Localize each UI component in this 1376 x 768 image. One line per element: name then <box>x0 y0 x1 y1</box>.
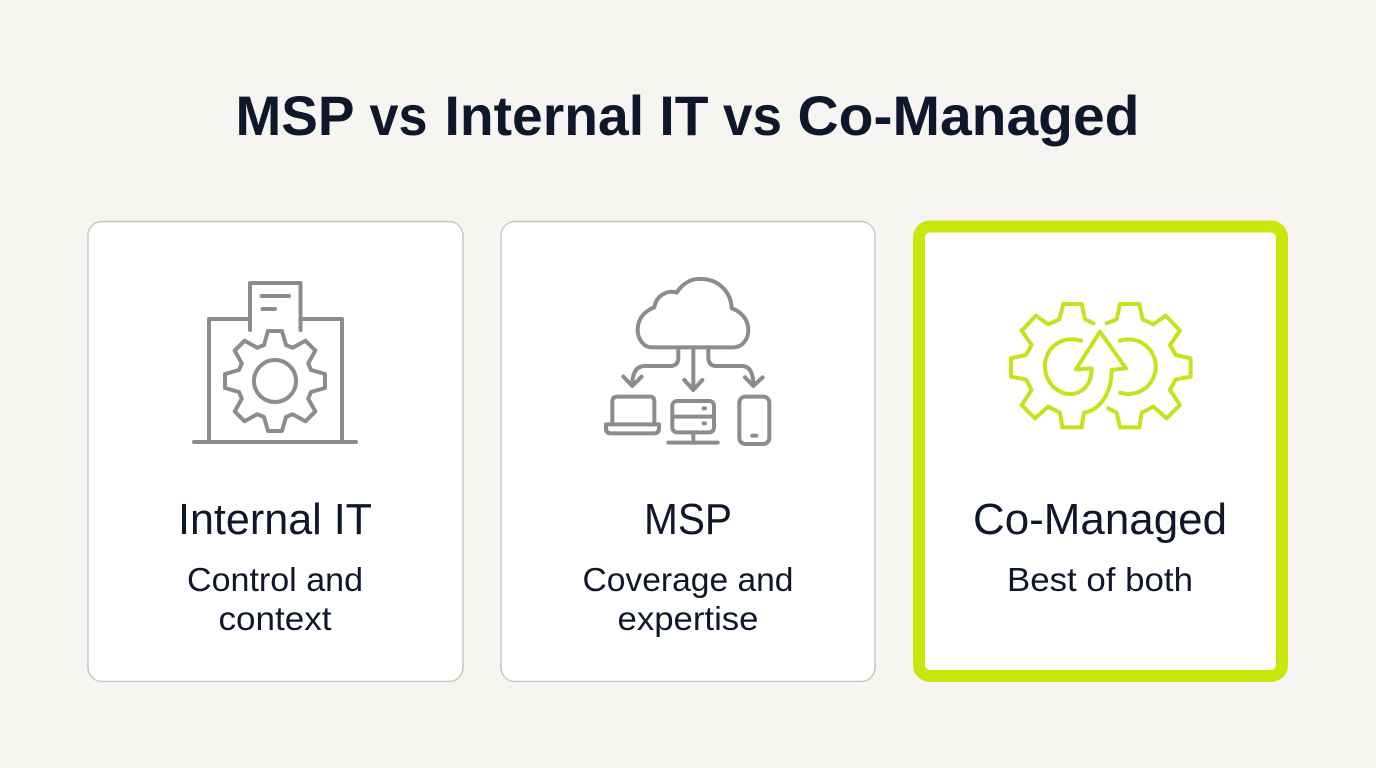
panel: Internal IT <box>88 222 463 682</box>
heading: MSP: MSP <box>644 496 732 544</box>
title: vs <box>370 84 428 147</box>
panel: Co-Managed (highlighted) <box>919 226 1282 676</box>
heading: Co-Managed: Co-Managed <box>973 496 1227 544</box>
card background <box>501 222 875 682</box>
description: Coverage and expertise: expertise <box>618 600 758 637</box>
icon: building with document and gear <box>194 283 356 442</box>
description: Best of both: Best of both <box>1007 561 1193 598</box>
icon: cloud distributing to devices <box>606 279 769 444</box>
title: Internal IT <box>444 84 708 147</box>
card background <box>88 222 463 682</box>
description: Coverage and expertise <box>582 561 794 637</box>
title: vs <box>723 84 782 147</box>
description: Control and context: context <box>218 600 332 637</box>
title <box>236 84 1140 147</box>
description: Control and context: Control and <box>187 561 363 598</box>
panel: MSP <box>501 222 875 682</box>
card background with lime border <box>919 226 1282 676</box>
description: Control and context <box>187 561 363 637</box>
title: MSP <box>236 84 354 147</box>
heading: Internal IT: Internal IT <box>178 496 372 544</box>
title: Co-Managed <box>798 84 1140 147</box>
icon: interlocking gears with upward arrow <box>1011 304 1191 427</box>
description: Coverage and expertise: Coverage and <box>582 561 794 598</box>
